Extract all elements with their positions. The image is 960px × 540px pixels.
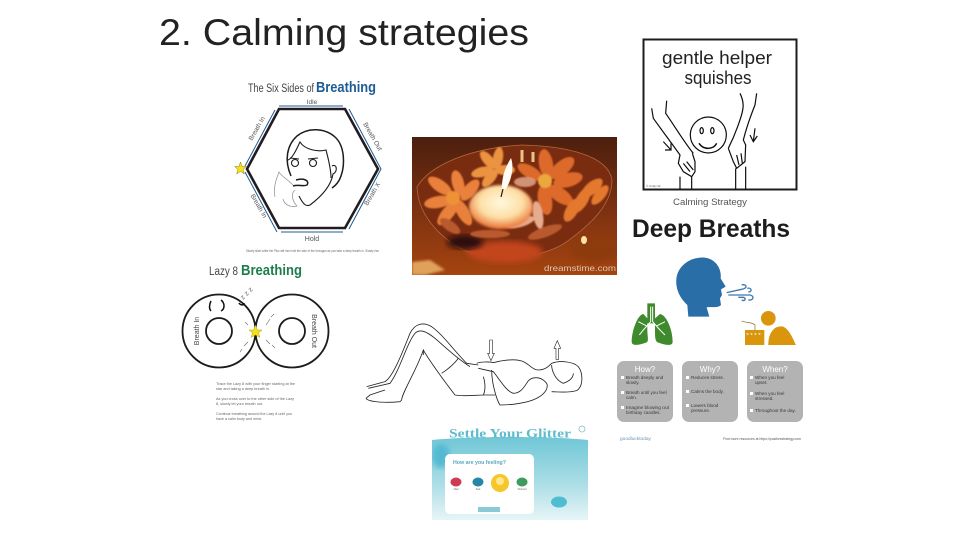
panel: lazy 8 breathing [182, 263, 328, 421]
panel: gentle helper squishes [644, 40, 796, 190]
card: how: Breath deeply and [626, 375, 664, 380]
labels: Breath In [194, 317, 201, 345]
side labels: Breath X [363, 181, 382, 207]
card: why: Lowers blood [691, 403, 719, 408]
feelings question: How are you feeling? [453, 460, 507, 466]
star [234, 162, 246, 174]
card: when [747, 361, 803, 422]
card: how: How? [635, 365, 656, 374]
instructions: Trace the Lazy 8 with your finger starting at the [216, 381, 295, 386]
mood: yellow selected [491, 474, 509, 492]
flower: right centre [515, 148, 584, 216]
slide [160, 18, 803, 520]
heading: breathing: Breathing [241, 263, 302, 279]
mood: red [450, 478, 462, 491]
card: when: When? [762, 365, 788, 374]
panel: deep breaths poster [617, 197, 803, 442]
button [478, 507, 500, 512]
flower: submerged pale petals [504, 177, 545, 231]
mood: blue [472, 478, 484, 491]
glass reflection [522, 150, 533, 162]
card: how: Imagine blowing out [626, 405, 670, 410]
card heading line two: squishes [684, 68, 752, 88]
character [551, 496, 567, 508]
side labels: Hold [305, 236, 319, 243]
spot reflection [581, 236, 587, 244]
card: how: calm. [626, 395, 637, 400]
flower: far right [560, 175, 612, 224]
card: how: birthday candles. [626, 410, 661, 415]
mood: blue: Sad [476, 488, 481, 491]
card: why: Why? [700, 365, 721, 374]
mood: green: Worried [518, 488, 527, 491]
instructions: As you cross over to the other side of the Lazy [216, 396, 294, 401]
instructions: 8, slowly let your breath out. [216, 401, 263, 406]
hexagon arrows [245, 106, 381, 232]
poster heading: Deep Breaths [632, 215, 790, 243]
zzz text: z z z [239, 286, 255, 301]
icon: person with birthday cake [742, 311, 796, 345]
flower: top [470, 146, 515, 190]
flowers [423, 146, 612, 243]
copyright mark: © Cindy W. [646, 184, 661, 188]
card: when: Throughout the day. [755, 408, 796, 413]
cards row [617, 361, 803, 422]
instructions: star and taking a deep breath in. [216, 386, 270, 391]
flame [502, 158, 512, 191]
card: how [617, 361, 673, 422]
card: when: When you feel [755, 375, 784, 380]
card: why: Reduces stress. [691, 375, 724, 380]
instructions: have a calm body and mind. [216, 416, 262, 421]
footer link: Find more resources at https://positivestrategy.com [723, 437, 801, 441]
heading: six sides: The Six Sides of [248, 83, 315, 95]
side labels: Breath Out [361, 122, 383, 152]
card: how: Breath until you feel [626, 390, 667, 395]
panel: lazy 8 breathing: Breath Out [310, 314, 317, 348]
icon: lungs [632, 303, 673, 345]
face illustration [287, 130, 343, 206]
hexagon [247, 109, 378, 228]
instructions: Continue breathing around the Lazy 8 until you [216, 411, 292, 416]
watercolor patch [432, 444, 450, 468]
side labels: Idle [307, 99, 318, 106]
icon: breath wind [727, 285, 753, 300]
side labels [248, 99, 383, 243]
title: 2. Calming strategies [159, 12, 529, 53]
table glow [571, 238, 619, 262]
photo background [412, 137, 617, 275]
candle [469, 185, 533, 229]
card heading: gentle helper [662, 48, 772, 68]
card: when: When you feel [755, 391, 784, 396]
watercolor background [432, 436, 588, 520]
table light [412, 260, 445, 275]
instructions [216, 381, 295, 421]
poster subtitle: Calming Strategy [673, 197, 747, 208]
child and helper hands [652, 93, 757, 189]
illustration: person lying down breathing [366, 324, 582, 405]
card: why: Calms the body. [691, 389, 724, 394]
card: when: stressed. [755, 396, 774, 401]
watermark: dreamstime.com [544, 263, 616, 273]
bowl [417, 145, 612, 258]
card: why [682, 361, 738, 422]
photo: floating candle in bowl [412, 137, 617, 275]
feelings card [445, 454, 534, 514]
bowl lower glow [467, 241, 543, 263]
icon: info circle [579, 426, 585, 432]
rays [240, 314, 275, 352]
caption: Slowly slide while the Plus will rise hold the side of the hexagon as you take a deep breath in, Slowly rise [246, 249, 379, 253]
side labels: Breath In [249, 193, 268, 220]
glitter title: Settle Your Glitter [449, 426, 571, 440]
bowl lower shadow [447, 235, 483, 249]
heading: lazy 8: Lazy 8 [209, 266, 238, 278]
mood: red: Mad [454, 488, 459, 491]
icon: head [676, 257, 726, 317]
closed eyes and zzz [210, 300, 244, 311]
mood: green [516, 478, 528, 491]
side labels: Breath In [248, 115, 267, 142]
panel: settle your glitter [432, 426, 588, 520]
wick [501, 189, 503, 197]
card: how: slowly. [626, 380, 639, 385]
card: when: upset. [755, 380, 768, 385]
breath puffs [274, 172, 297, 207]
flower: left [423, 169, 483, 228]
flower: underwater streaks [437, 215, 564, 243]
panel: six sides of breathing [234, 80, 383, 253]
star [249, 325, 262, 338]
figure eight [182, 294, 328, 368]
footer logo: goodlucktoday [620, 436, 652, 442]
heading: breathing: Breathing [316, 80, 376, 96]
card border [644, 40, 796, 190]
card: why: pressure. [691, 408, 710, 413]
